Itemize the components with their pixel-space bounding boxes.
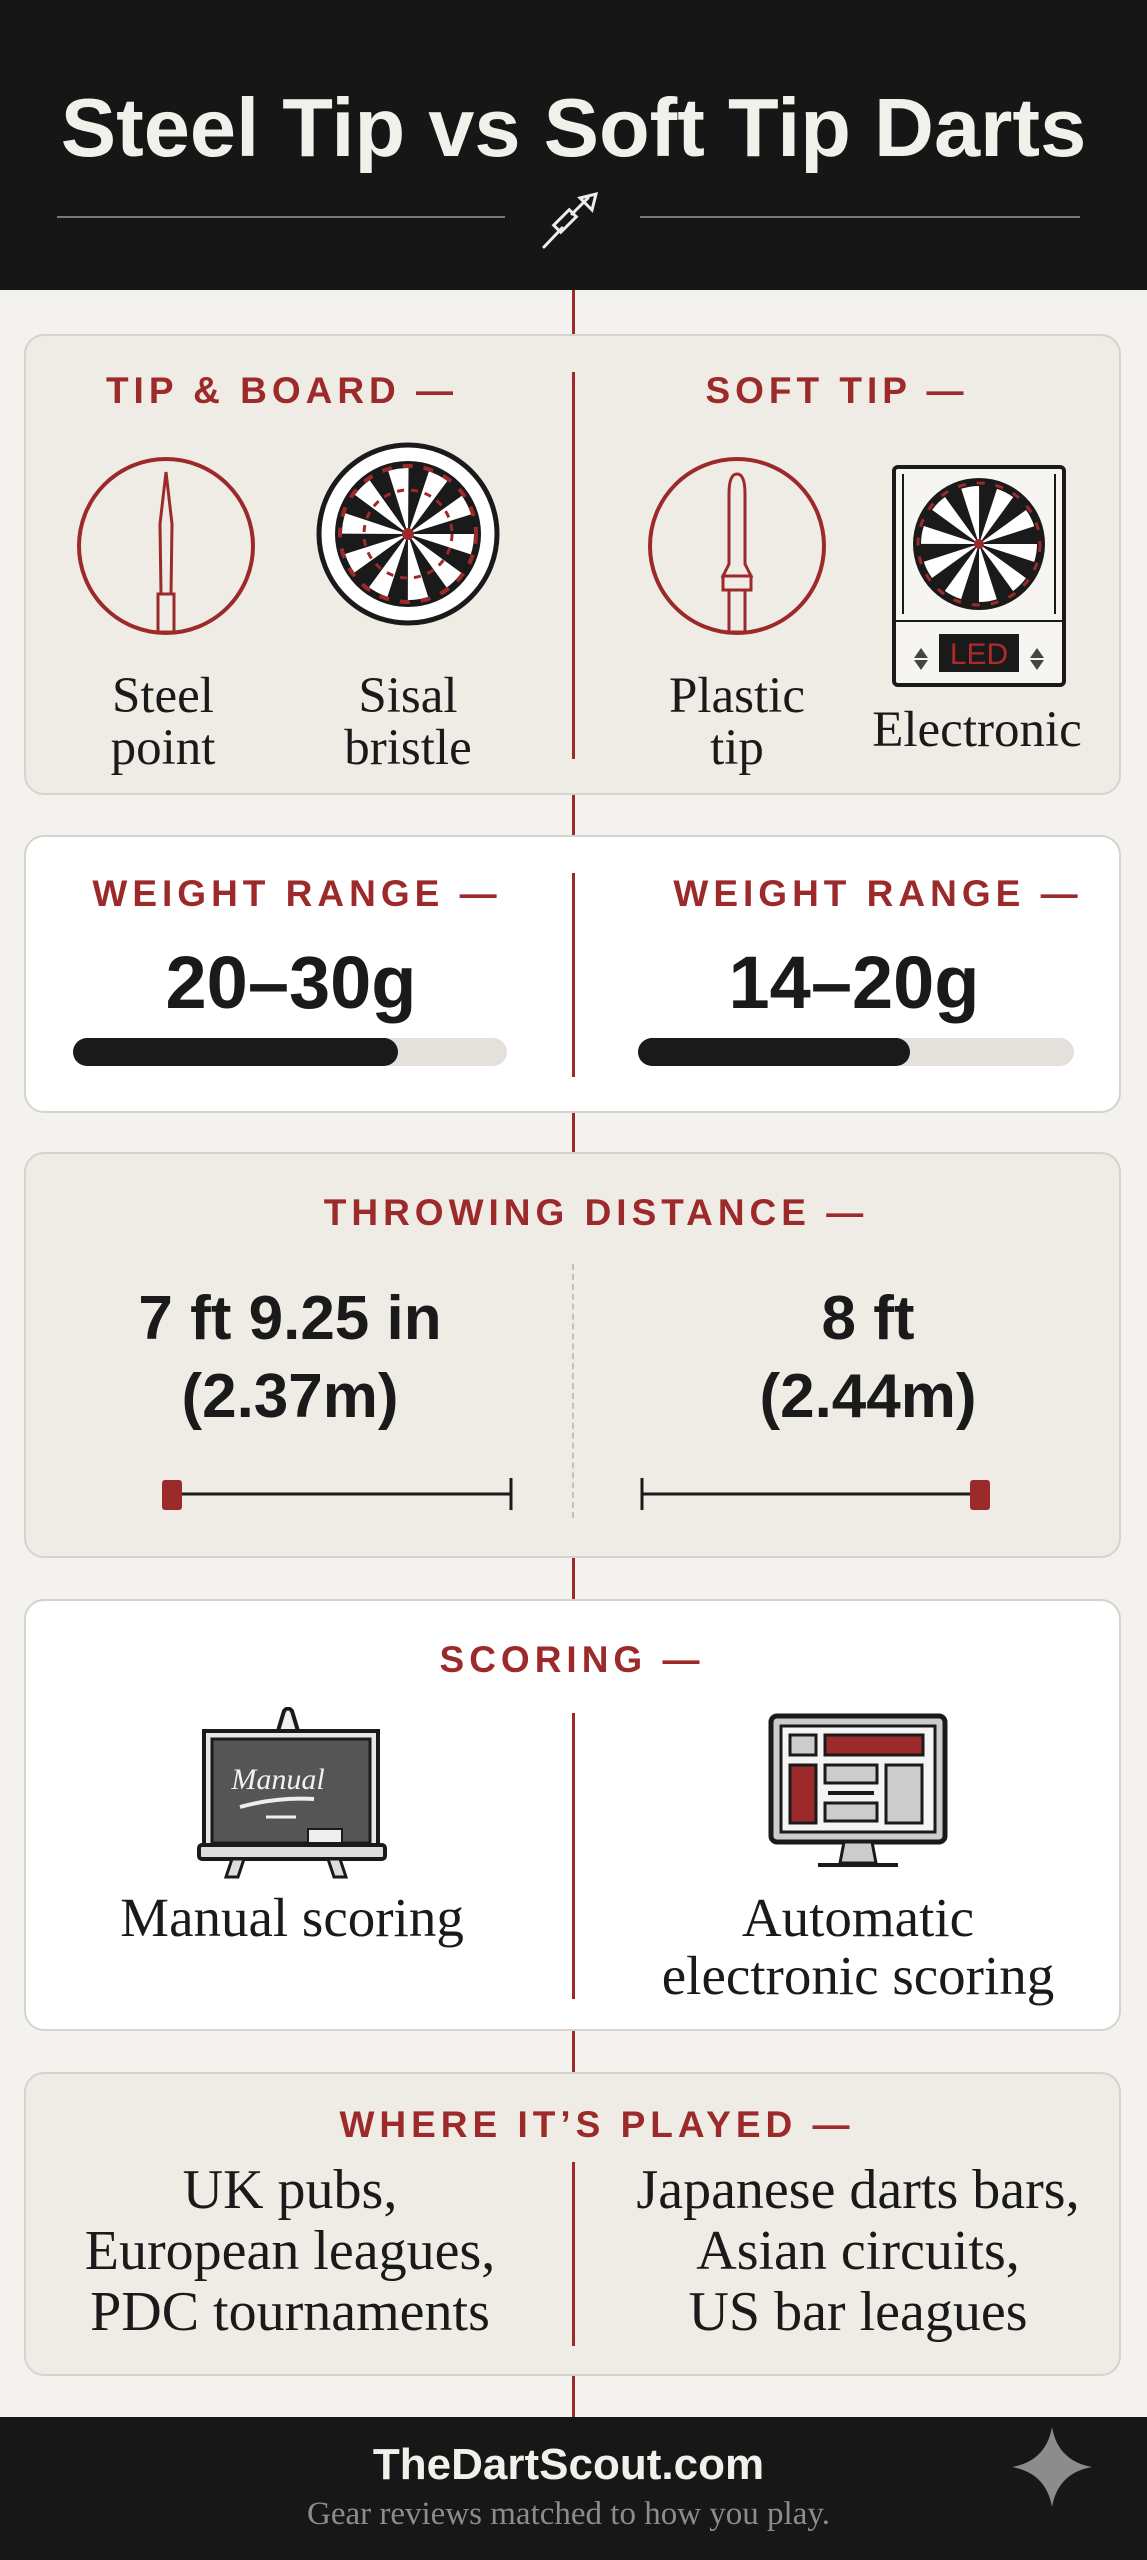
panel: weight range (24, 835, 1121, 1113)
label: tip & board: TIP & BOARD — (106, 370, 458, 411)
text: steel venues: UK pubs, (183, 2159, 397, 2221)
panel: where it's played (24, 2072, 1121, 2376)
text: automatic electronic scoring: electronic scoring (662, 1945, 1054, 2006)
ruler: soft (640, 1478, 990, 1510)
text: steel point (111, 668, 216, 776)
value: soft distance (759, 1284, 977, 1431)
text: plastic tip: Plastic (669, 668, 805, 724)
label: throwing distance: THROWING DISTANCE — (324, 1192, 868, 1233)
label: soft tip: SOFT TIP — (705, 370, 969, 411)
icon: chalkboard (197, 1707, 387, 1878)
center spine line (572, 290, 575, 2417)
value: soft distance: (2.44m) (759, 1362, 977, 1431)
icon: monitor (768, 1714, 948, 1867)
value: 20-30g: 20–30g (166, 941, 416, 1024)
value: steel distance: 7 ft 9.25 in (138, 1284, 442, 1353)
divider (572, 2162, 575, 2346)
text: soft venues: Asian circuits, (696, 2220, 1020, 2282)
icon: electronic board (892, 465, 1066, 687)
brand: TheDartScout.com (373, 2440, 764, 2489)
bar: soft weight (638, 1038, 1074, 1066)
text: steel venues: PDC tournaments (90, 2281, 490, 2343)
label: scoring: SCORING — (440, 1639, 704, 1680)
label: weight right: WEIGHT RANGE — (673, 873, 1083, 914)
value: 14-20g: 14–20g (729, 941, 979, 1024)
text: steel point: Steel (112, 668, 214, 724)
text: plastic tip: tip (710, 720, 764, 776)
ruler: steel (162, 1478, 512, 1510)
footer (0, 2417, 1147, 2560)
text: sisal bristle: bristle (344, 720, 472, 776)
text: electronic: Electronic (872, 702, 1082, 758)
panel: tip & board (24, 334, 1121, 795)
value: soft distance: 8 ft (822, 1284, 914, 1353)
value: steel distance (138, 1284, 442, 1431)
divider (572, 1713, 575, 1999)
text: automatic electronic scoring: Automatic (742, 1887, 974, 1948)
text: soft venues: US bar leagues (688, 2281, 1028, 2343)
panel: scoring (24, 1599, 1121, 2031)
icon: sisal dartboard (316, 442, 500, 626)
dashed divider (572, 1264, 574, 1518)
text: soft venues (636, 2159, 1080, 2343)
text: manual scoring: Manual scoring (120, 1887, 464, 1948)
icon: plastic tip (648, 457, 826, 635)
text: sisal bristle: Sisal (358, 668, 458, 724)
text: sisal bristle (344, 668, 472, 776)
header dividers and dart icon (57, 192, 1080, 249)
tagline: Gear reviews matched to how you play. (307, 2496, 830, 2532)
label: where it's played: WHERE IT’S PLAYED — (339, 2104, 855, 2145)
icon: chalkboard: Manual (230, 1763, 325, 1796)
header (0, 0, 1147, 290)
icon: steel point (77, 457, 255, 635)
divider (572, 372, 575, 759)
icon: sparkle (1012, 2427, 1092, 2507)
label: weight left: WEIGHT RANGE — (92, 873, 502, 914)
text: steel venues: European leagues, (85, 2220, 495, 2282)
divider (572, 873, 575, 1077)
text: plastic tip (669, 668, 805, 776)
text: soft venues: Japanese darts bars, (636, 2159, 1080, 2221)
text: automatic electronic scoring (662, 1887, 1054, 2006)
icon: electronic board: LED (950, 638, 1008, 671)
title: Steel Tip vs Soft Tip Darts (61, 81, 1086, 174)
text: steel point: point (111, 720, 215, 776)
text: steel venues (85, 2159, 495, 2343)
panel: throwing distance (24, 1152, 1121, 1558)
bar: steel weight (73, 1038, 507, 1066)
value: steel distance: (2.37m) (181, 1362, 399, 1431)
